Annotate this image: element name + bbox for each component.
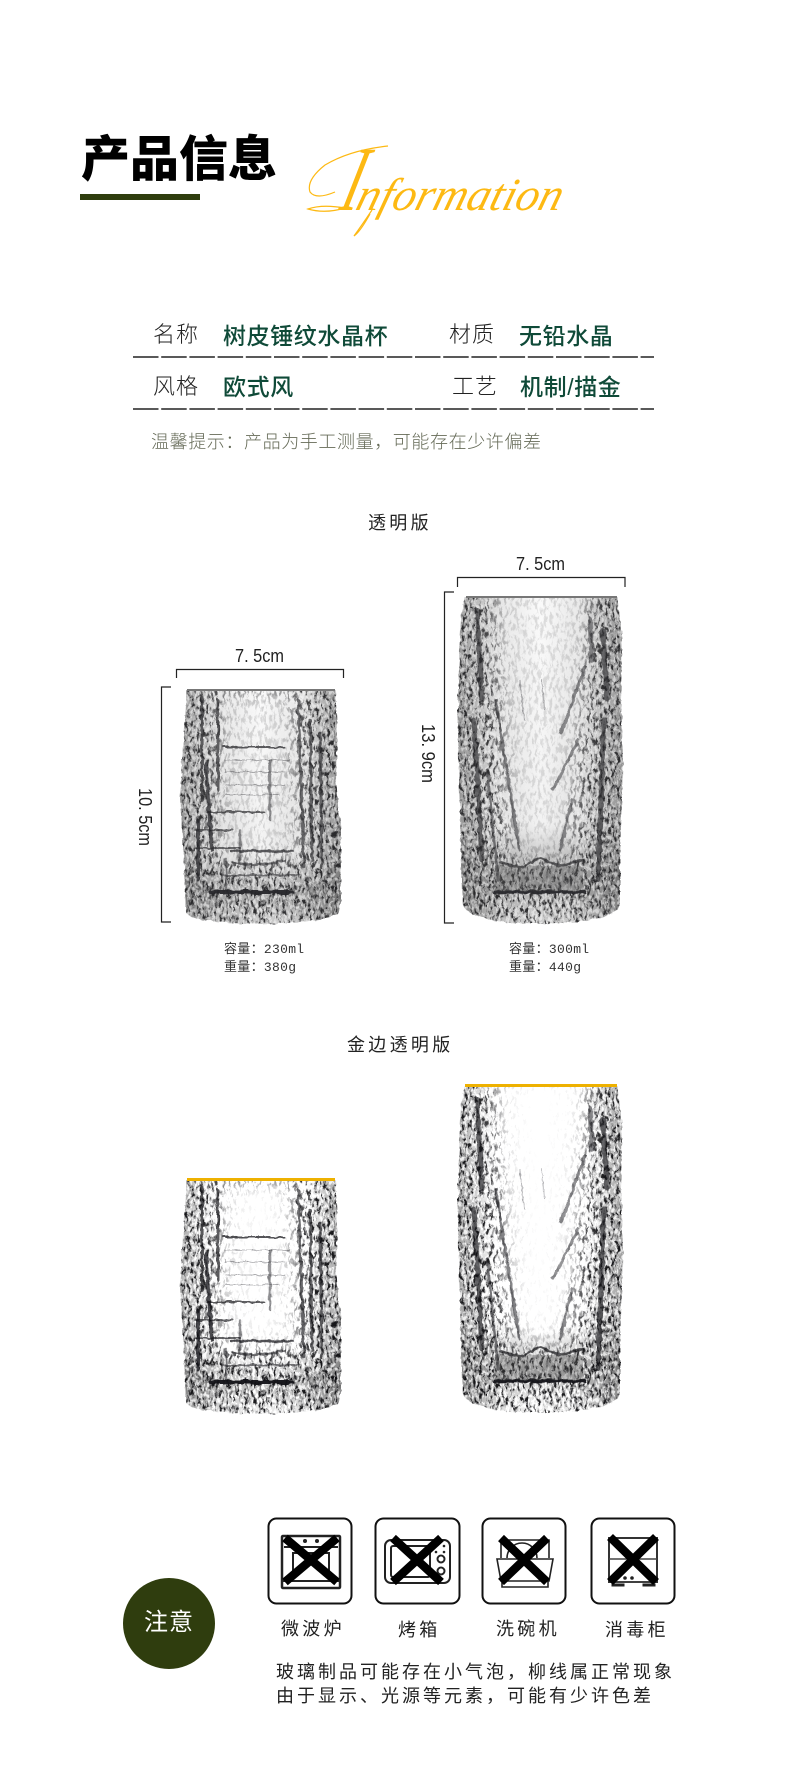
icon label: sterilizer: 消毒柜 <box>605 1620 669 1640</box>
label: name: 名称 <box>153 322 199 347</box>
notice text: 玻璃制品可能存在小气泡，柳线属正常现象 <box>276 1662 675 1682</box>
notice text: 由于显示、光源等元素，可能有少许色差 <box>276 1686 654 1706</box>
notice text <box>276 1662 675 1706</box>
icon: no oven <box>374 1518 460 1604</box>
title: 产品信息 <box>81 120 277 191</box>
spec: tall glass: 容量：300ml <box>509 942 589 957</box>
dimension: tall glass height: 13. 9cm <box>418 724 438 783</box>
divider row 1 <box>133 356 654 358</box>
spec: tall glass <box>509 942 589 975</box>
icon: no microwave <box>268 1518 352 1604</box>
glass: tall clear <box>457 596 624 924</box>
spec: short glass: 重量：380g <box>224 960 296 975</box>
heading: clear version: 透明版 <box>368 513 432 533</box>
glass: tall gold rim <box>457 1084 624 1414</box>
dimension: short glass width: 7. 5cm <box>235 646 284 666</box>
glass: short gold rim <box>180 1178 342 1415</box>
dimension: tall glass height <box>418 591 454 924</box>
dimension: short glass width <box>176 646 344 678</box>
heading: gold rim version: 金边透明版 <box>347 1035 454 1055</box>
title underline bar <box>80 194 200 200</box>
value: material: 无铅水晶 <box>519 323 613 349</box>
label: style: 风格 <box>153 374 199 399</box>
dimension: short glass height <box>135 686 171 923</box>
dimension: tall glass width <box>456 554 626 587</box>
script heading: Information <box>306 140 570 236</box>
spec: tall glass: 重量：440g <box>509 960 581 975</box>
label: material: 材质 <box>449 322 495 347</box>
script heading: Information: nformation <box>351 170 570 221</box>
divider row 2 <box>133 408 654 410</box>
spec: short glass: 容量：230ml <box>224 942 304 957</box>
icon: no dishwasher <box>482 1518 566 1604</box>
glass: short clear <box>180 689 342 925</box>
value: style: 欧式风 <box>223 374 294 400</box>
badge: notice <box>123 1578 215 1669</box>
badge text: 注意 <box>144 1609 194 1636</box>
icon: no sterilizer <box>590 1518 676 1604</box>
reminder note: 温馨提示：产品为手工测量，可能存在少许偏差 <box>151 432 542 452</box>
value: name: 树皮锤纹水晶杯 <box>223 323 388 349</box>
label: craft: 工艺 <box>452 374 498 399</box>
dimension: short glass height: 10. 5cm <box>135 788 155 846</box>
panel: product info table <box>133 322 654 452</box>
icon label: microwave: 微波炉 <box>281 1619 345 1639</box>
value: craft: 机制/描金 <box>520 374 621 400</box>
icon label: oven: 烤箱 <box>398 1620 441 1640</box>
spec: short glass <box>224 942 304 975</box>
icon label: dishwasher: 洗碗机 <box>496 1619 560 1639</box>
dimension: tall glass width: 7. 5cm <box>516 554 565 574</box>
